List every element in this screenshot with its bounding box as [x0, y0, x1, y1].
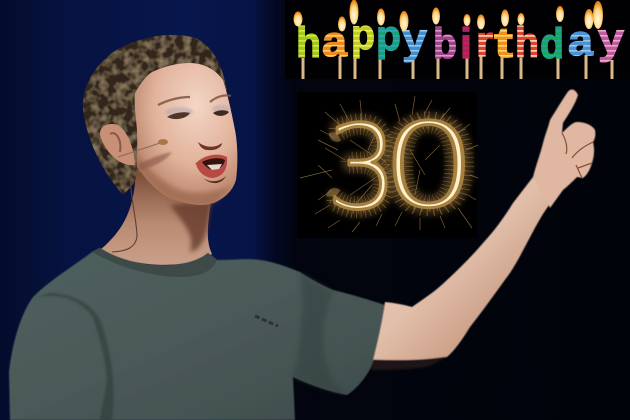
microphone	[118, 139, 168, 157]
sparks	[300, 96, 478, 232]
candle letters: p	[376, 12, 401, 60]
shirt left sleeve seam and shadow	[33, 293, 114, 420]
cheek shadow	[137, 152, 172, 170]
sparkler fuzz	[326, 99, 477, 236]
candle letters	[296, 11, 624, 68]
sparkler trace: 3	[326, 101, 398, 236]
sparkler number 30	[300, 96, 478, 236]
candle letters: r	[476, 18, 493, 66]
jaw shading	[137, 150, 232, 205]
ear inner	[110, 133, 120, 152]
shirt logo	[255, 316, 278, 326]
candle letters: h	[296, 19, 321, 67]
neck shadow	[170, 200, 212, 252]
t-shirt	[9, 248, 385, 420]
finger lines and shadows	[562, 133, 593, 178]
eye left	[167, 112, 190, 119]
eye right	[213, 110, 229, 116]
candle letters: a	[322, 18, 348, 66]
candle letters: a	[568, 17, 594, 65]
neck	[100, 172, 212, 265]
eyebrow left	[158, 97, 190, 105]
nose shadow	[198, 142, 222, 150]
candle flames	[294, 0, 603, 32]
sparkler glow halo	[326, 99, 477, 236]
ear	[100, 124, 135, 165]
sparkler fuzz: 3	[326, 101, 398, 236]
eyelid shadow right	[212, 105, 230, 113]
hair	[83, 35, 227, 195]
candle panel background	[285, 0, 630, 79]
sparkler glow halo: 0	[381, 99, 477, 234]
mouth	[195, 155, 227, 183]
sparkler trace	[326, 99, 477, 236]
hand	[533, 89, 595, 208]
sparkler fuzz: 0	[381, 99, 477, 234]
eyebrow right	[210, 95, 231, 102]
candle letters: t	[494, 19, 513, 67]
earphone wire	[112, 175, 137, 252]
elbow shadow	[371, 357, 447, 370]
candle letters: y	[598, 15, 624, 63]
sparkler glow halo: 3	[326, 101, 398, 236]
eyelid shadow left	[165, 107, 193, 117]
shirt collar	[92, 248, 217, 277]
candle letters: p	[351, 11, 375, 59]
sparkler panel background	[297, 92, 477, 238]
face	[135, 63, 237, 205]
candle letters: d	[540, 20, 564, 68]
candle letters: h	[515, 19, 539, 67]
candle sticks	[302, 55, 614, 79]
candle letters: b	[433, 20, 457, 68]
arm	[373, 177, 563, 361]
sparkler trace: 0	[381, 99, 477, 234]
candle letters: y	[402, 15, 427, 63]
candles: happy birthday	[294, 0, 624, 79]
candle letters: i	[460, 20, 472, 68]
shirt fold under arm	[293, 272, 347, 395]
